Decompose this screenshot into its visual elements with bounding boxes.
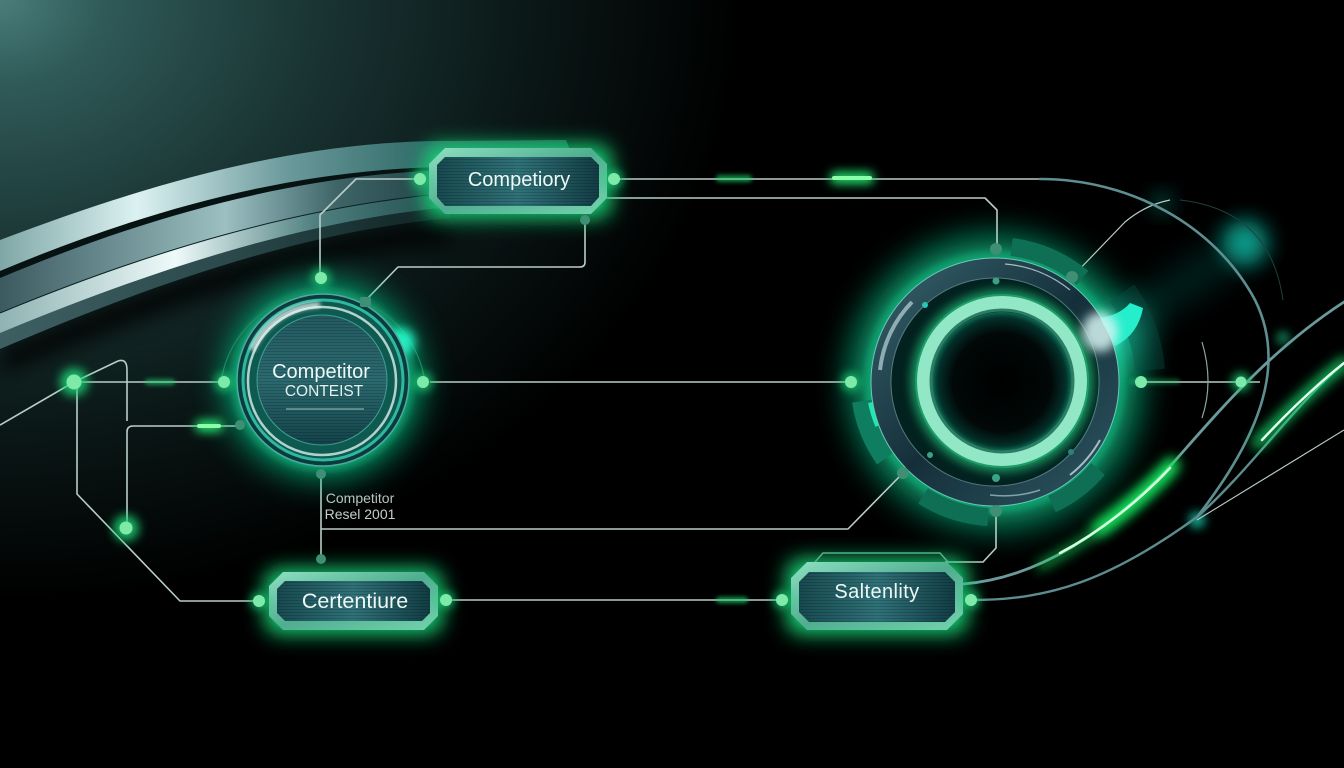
outer arc segments (863, 247, 1150, 517)
node: competiory box: Competiory (468, 169, 570, 191)
dark metal ring (871, 258, 1119, 506)
small caption (325, 490, 396, 522)
sweeping curves (963, 179, 1344, 600)
circle node: competitor context (221, 286, 425, 474)
connector nodes (60, 171, 1250, 609)
curved metallic bands (0, 140, 570, 375)
small caption: Competitor (326, 490, 395, 506)
connector lines (0, 179, 1344, 601)
node: certentiure box: Certentiure (302, 589, 408, 613)
node: saltenlity box: Saltenlity (834, 581, 920, 603)
dim nodes (235, 215, 1078, 564)
glow: big ring (869, 193, 1289, 528)
bright nodes (60, 171, 1250, 609)
node: saltenlity box (787, 553, 967, 634)
small caption: Resel 2001 (325, 506, 396, 522)
circle title: Competitor (272, 361, 370, 383)
flare (1082, 303, 1143, 352)
green line highlights (145, 172, 1180, 603)
circle subtitle: CONTEIST (285, 383, 364, 400)
inner glowing ring (916, 295, 1088, 467)
node: certentiure box (265, 569, 442, 634)
node: competiory box (425, 145, 611, 218)
big ring node (863, 247, 1150, 517)
